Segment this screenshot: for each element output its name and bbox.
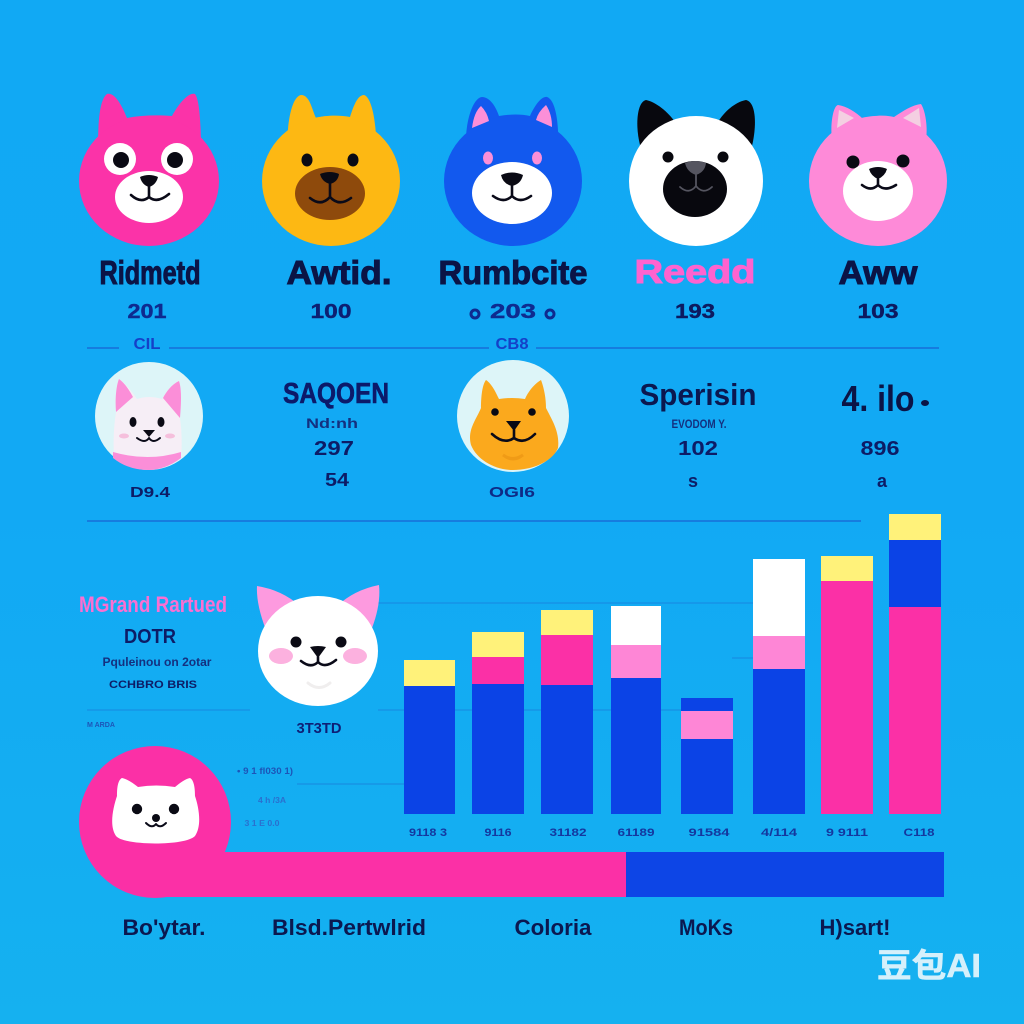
watermark: 豆包AI	[877, 947, 981, 984]
animal values: 193	[675, 301, 715, 323]
bottom progress bar with cat badge	[79, 746, 944, 898]
bar 5	[681, 698, 733, 814]
small axis notes beside the chart: 4 h /3A	[258, 796, 286, 805]
section divider labels: CB8	[496, 336, 529, 353]
bottom category labels: Bo'ytar.	[122, 915, 206, 940]
bar 1	[404, 660, 455, 814]
bar 2	[472, 632, 524, 814]
bar 4	[611, 606, 661, 814]
animal names: Aww	[838, 254, 918, 291]
caption: left circle: D9.4	[130, 484, 171, 501]
profile text: 4. ilo	[842, 378, 929, 491]
bar 7	[821, 556, 873, 814]
profile text: 4. ilo: a	[877, 471, 888, 491]
bar tick labels: 61189	[618, 827, 654, 839]
profile text: Saqoen: SAQOEN	[283, 378, 389, 410]
panel: left text block: M ARDA	[87, 722, 115, 729]
panel: second row of profiles	[95, 360, 929, 501]
caption: large cat: 3T3TD	[296, 720, 342, 737]
section divider labels	[134, 336, 529, 353]
small axis notes beside the chart	[237, 766, 293, 828]
animal values: 100	[310, 301, 352, 323]
bottom category labels: H)sart!	[820, 915, 890, 940]
profile text: Saqoen	[283, 378, 389, 490]
bar tick labels: 9 9111	[826, 827, 868, 839]
caption: right circle: OGI6	[489, 484, 535, 501]
small axis notes beside the chart: • 9 1 fl030 1)	[237, 766, 293, 776]
animal names: Rumbcite	[438, 254, 588, 291]
profile text: Sperisin: Sperisin	[640, 377, 756, 412]
animal values: 103	[858, 301, 898, 323]
profile text: Saqoen: 54	[325, 470, 349, 490]
bar 8	[889, 514, 941, 814]
panel: left text block: DOTR	[124, 626, 176, 648]
bottom category labels: Coloria	[514, 915, 592, 940]
bottom category labels: MoKs	[679, 915, 733, 940]
icon: blue dog face	[444, 97, 582, 246]
profile text: Sperisin: 102	[678, 438, 718, 460]
section divider labels: CIL	[134, 336, 161, 353]
small axis notes beside the chart: 3 1 E 0.0	[244, 819, 280, 828]
animal names: Ridmetd	[100, 254, 200, 291]
icon: light pink cat face	[809, 104, 947, 246]
panel: top row of animal profiles	[79, 94, 947, 323]
profile text: Sperisin	[640, 377, 756, 491]
profile text: 4. ilo: 4. ilo	[842, 378, 914, 419]
bar tick labels: 91584	[688, 827, 731, 839]
animal names	[100, 253, 918, 291]
animal names: Awtid.	[286, 254, 392, 291]
icon: yellow bear face	[262, 95, 400, 246]
animal values: 203	[490, 301, 536, 323]
bar tick labels: 9118 3	[409, 827, 447, 839]
icon: white and black panda face	[629, 100, 763, 246]
bar tick labels: C118	[904, 827, 934, 839]
icon: orange fox in circle	[457, 360, 569, 472]
profile text: Sperisin: EVODOM Y.	[672, 417, 726, 431]
panel: left text block: MGrand Rartued	[79, 592, 227, 617]
panel: left text block: CCHBRO BRIS	[109, 679, 197, 691]
panel: left text block	[79, 592, 227, 729]
bottom category labels: Blsd.Pertwlrid	[272, 915, 426, 940]
icon: white cat badge	[112, 778, 199, 844]
bar tick labels: 9116	[484, 827, 512, 839]
bar 6	[753, 559, 805, 814]
icon: magenta cat face	[79, 94, 219, 246]
icon: white cat in circle	[95, 362, 203, 470]
bar tick labels: 31182	[550, 827, 586, 839]
profile text: Sperisin: s	[688, 471, 698, 491]
icon: large white cat with pink ears	[257, 585, 379, 706]
bar tick labels: 4/114	[761, 827, 798, 839]
bottom category labels	[122, 915, 890, 940]
panel: left text block: Pquleinou on 2otar	[102, 655, 212, 669]
profile text: Saqoen: 297	[314, 438, 354, 460]
bar chart	[404, 514, 941, 839]
bar 3	[541, 610, 593, 814]
bar tick labels	[409, 827, 934, 839]
profile text: 4. ilo: 896	[860, 438, 900, 460]
animal names: Reedd	[634, 253, 756, 290]
animal values	[128, 301, 898, 323]
animal values: 201	[128, 301, 166, 323]
profile text: Saqoen: Nd:nh	[306, 415, 358, 431]
